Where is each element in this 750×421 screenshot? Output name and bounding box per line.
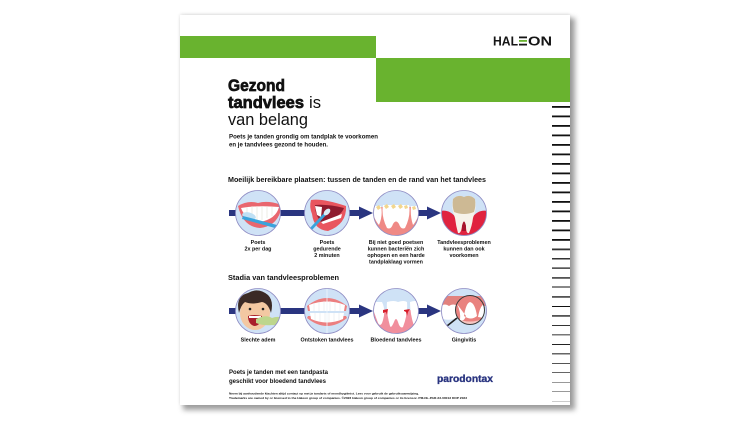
caption: poets 2x per dag: 2x per dag xyxy=(245,246,271,252)
captions row 2 xyxy=(241,338,476,344)
title xyxy=(228,76,321,129)
caption: poets gedurende 2 minuten: gedurende xyxy=(313,246,341,252)
callout: toothpaste advice: geschikt voor bloedend tandvlees xyxy=(229,378,326,385)
icon: gingivitis magnifier xyxy=(441,288,487,334)
intro text: Poets je tanden grondig om tandplak te voorkomen xyxy=(229,134,378,140)
callout: toothpaste advice: Poets je tanden met een tandpasta xyxy=(229,369,328,376)
footnote: Trademarks are owned by or licensed to the Haleon group of companies. ©2023 Haleon group of companies or its licensor. PM-NL-PAR-23-00013 DOP 2023 xyxy=(229,396,467,400)
caption: poets gedurende 2 minuten: 2 minuten xyxy=(314,253,340,259)
captions row 2: Ontstoken tandvlees xyxy=(300,338,354,344)
ruler ticks xyxy=(552,106,570,402)
caption: bacterien en tandplaklaag: ophopen en een harde xyxy=(367,253,425,259)
caption: bacterien en tandplaklaag: kunnen bacteriën zich xyxy=(368,246,424,252)
caption: tandvleesproblemen voorkomen: Tandvleesproblemen xyxy=(437,240,491,246)
page sheet xyxy=(180,15,570,405)
caption: bacterien en tandplaklaag xyxy=(367,240,425,266)
intro text xyxy=(229,134,378,148)
icon: bleeding gums xyxy=(372,288,420,336)
icon: gum disease tooth xyxy=(441,190,487,236)
logo: Haleon: ON xyxy=(528,34,552,48)
captions row 2: Gingivitis xyxy=(452,338,476,344)
process arrow row 2 xyxy=(229,304,441,318)
caption: poets 2x per dag: Poets xyxy=(251,240,265,246)
caption: poets gedurende 2 minuten: Poets xyxy=(320,240,334,246)
logo: parodontax: parodontax xyxy=(437,374,493,385)
icon: brushing teeth smile xyxy=(236,190,282,236)
captions row 2: Bloedend tandvlees xyxy=(371,338,421,344)
footnote xyxy=(229,392,467,400)
icon: bad breath boy xyxy=(236,288,284,334)
icon: brushing inside of mouth xyxy=(304,190,350,236)
caption: poets 2x per dag xyxy=(245,240,271,252)
heading: stadia van tandvleesproblemen: Stadia van tandvleesproblemen xyxy=(228,273,339,282)
logo: Haleon: HAL xyxy=(493,34,518,48)
title: Gezond xyxy=(228,76,285,95)
caption: bacterien en tandplaklaag: Bij niet goed poetsen xyxy=(369,240,423,246)
intro text: en je tandvlees gezond te houden. xyxy=(229,142,328,148)
title: van belang xyxy=(228,110,308,129)
process arrow row 1 xyxy=(229,206,441,220)
captions row 2: Slechte adem xyxy=(241,338,276,344)
callout: toothpaste advice xyxy=(229,369,328,385)
heading: moeilijk bereikbare plaatsen: Moeilijk bereikbare plaatsen: tussen de tanden en de rand van het tandvlees xyxy=(228,175,486,184)
title: is xyxy=(309,93,321,112)
caption: bacterien en tandplaklaag: tandplaklaag vormen xyxy=(369,260,423,266)
footnote: Neem bij aanhoudende klachten altijd contact op met je tandarts of mondhygiënist. Lees voor gebruik de gebruiksaanwijzing. xyxy=(229,392,419,396)
icon: plaque on teeth xyxy=(372,190,420,238)
icon: inflamed gums xyxy=(304,288,350,334)
logo: Haleon xyxy=(493,34,552,48)
caption: tandvleesproblemen voorkomen xyxy=(437,240,491,259)
caption: tandvleesproblemen voorkomen: kunnen dan ook xyxy=(443,246,485,252)
green banner left xyxy=(180,36,376,58)
green banner right xyxy=(376,58,570,102)
title: tandvlees xyxy=(228,93,304,112)
caption: poets gedurende 2 minuten xyxy=(313,240,341,259)
caption: tandvleesproblemen voorkomen: voorkomen xyxy=(449,253,479,259)
